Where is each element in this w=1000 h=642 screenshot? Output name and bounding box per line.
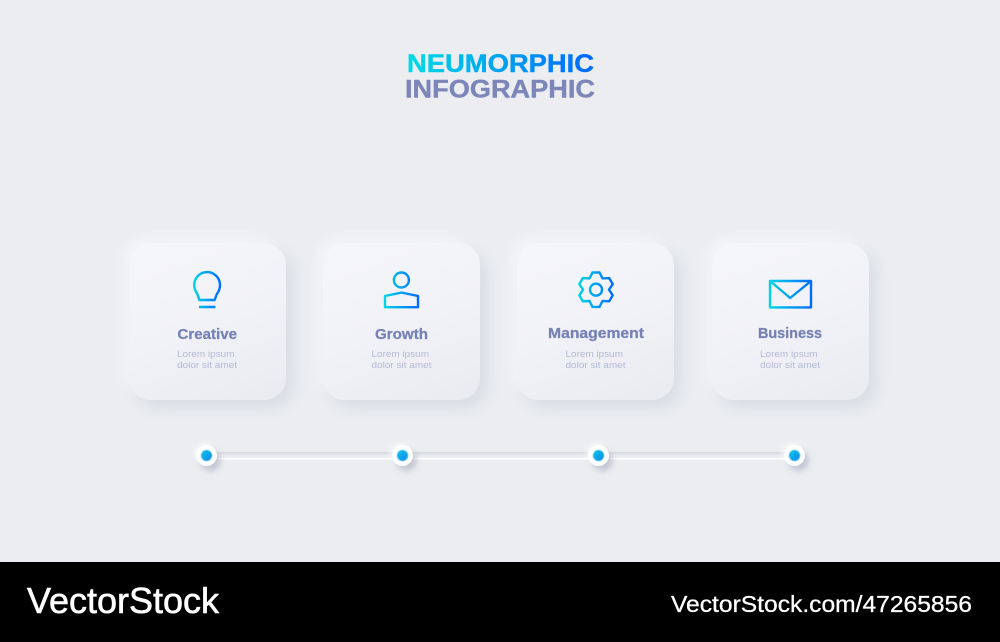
timeline dot 4: [784, 445, 805, 466]
icon: gear: [579, 272, 613, 307]
icon: light bulb: [194, 272, 220, 307]
text: business description: [760, 349, 820, 371]
footer bar: [0, 562, 1000, 642]
footer url: VectorStock.com/47265856: [671, 591, 972, 617]
panel: creative: [129, 243, 286, 400]
text: growth description: dolor sit amet: [372, 360, 432, 371]
panel: management: [517, 243, 674, 400]
text: management description: dolor sit amet: [566, 360, 626, 371]
panel: growth: [323, 243, 480, 400]
text: creative description: dolor sit amet: [177, 360, 237, 371]
heading: management: Management: [548, 326, 644, 342]
text: growth description: Lorem ipsum: [372, 349, 429, 360]
title: NEUMORPHIC: [407, 50, 594, 78]
icon: person: [385, 272, 418, 307]
text: management description: [566, 349, 626, 371]
text: creative description: [177, 349, 237, 371]
panel: business: [712, 243, 869, 400]
text: business description: Lorem ipsum: [760, 349, 818, 360]
timeline dot 2: [392, 445, 413, 466]
heading: creative: Creative: [178, 327, 237, 343]
title: [405, 50, 595, 104]
timeline dot 3: [588, 445, 609, 466]
icon: envelope: [770, 281, 811, 307]
title: INFOGRAPHIC: [405, 76, 595, 104]
text: business description: dolor sit amet: [760, 360, 820, 371]
heading: business: Business: [758, 326, 822, 342]
timeline dot 1: [196, 445, 217, 466]
timeline: [196, 444, 811, 473]
text: growth description: [372, 349, 432, 371]
text: management description: Lorem ipsum: [566, 349, 623, 360]
text: creative description: Lorem ipsum: [177, 349, 235, 360]
heading: growth: Growth: [375, 327, 428, 343]
footer logo: VectorStock: [27, 580, 220, 621]
